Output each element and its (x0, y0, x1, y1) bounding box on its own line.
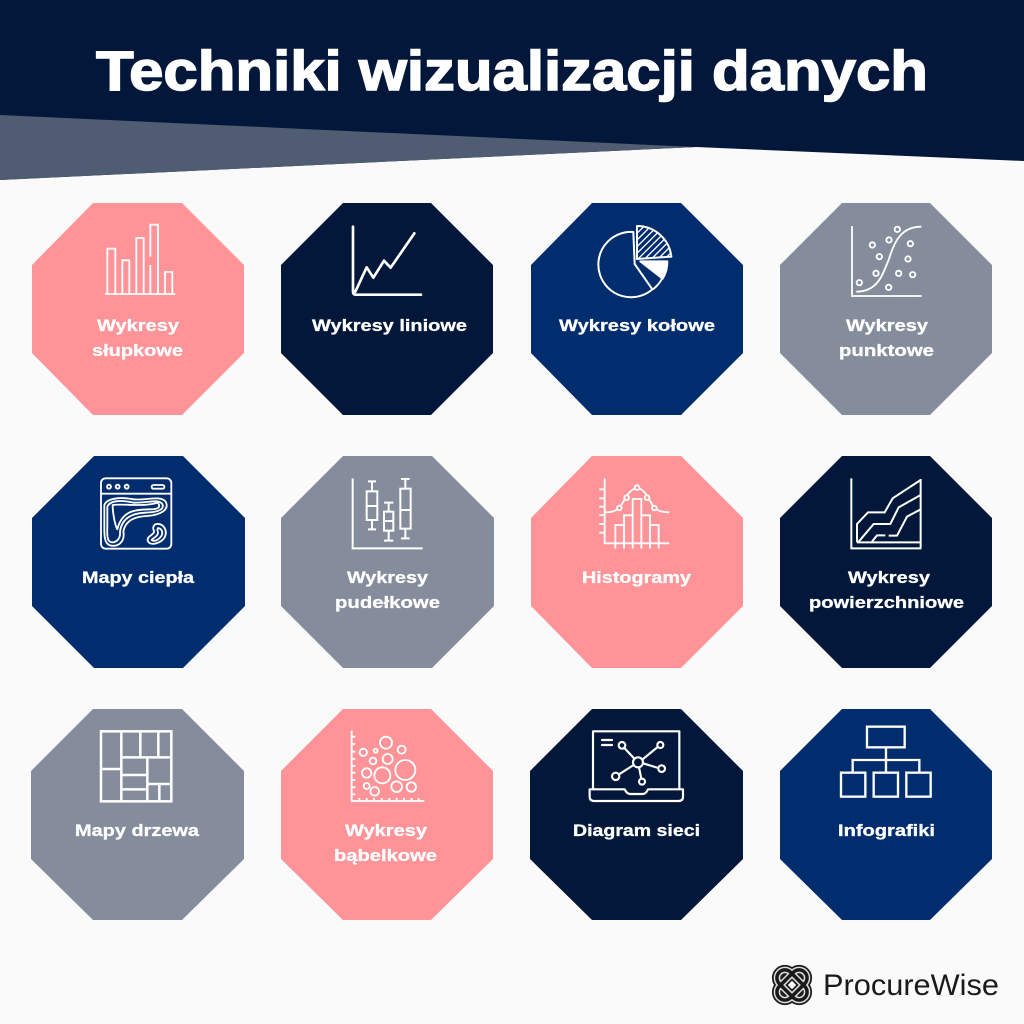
label: pudełkowe (335, 594, 440, 612)
label: Mapy drzewa (75, 822, 200, 840)
icon: histogram (599, 478, 669, 549)
label (92, 317, 183, 360)
label: powierzchniowe (809, 594, 964, 612)
label: Histogramy (582, 569, 692, 587)
label: Wykresy (345, 822, 428, 840)
label: Wykresy (347, 569, 429, 587)
label (809, 569, 964, 612)
panel: Wykresy kołowe (531, 203, 743, 415)
icon: scatter plot (852, 226, 922, 296)
icon: area chart (851, 478, 921, 548)
label: Mapy ciepła (82, 569, 195, 587)
label: punktowe (839, 342, 934, 360)
icon: network diagram on laptop (590, 731, 683, 801)
panel: Wykresy punktowe (780, 203, 992, 415)
label (335, 569, 440, 612)
logo: ProcureWise (774, 967, 999, 1003)
title: Techniki wizualizacji danych (96, 39, 928, 102)
label: Wykresy (848, 569, 931, 587)
panel: Wykresy bąbelkowe (281, 709, 493, 920)
panel: Histogramy (531, 456, 743, 668)
label (839, 317, 934, 360)
panel: Mapy ciepła (32, 456, 245, 668)
header banner (0, 0, 1024, 180)
label: Wykresy (846, 317, 929, 335)
panel: Wykresy liniowe (281, 203, 493, 415)
panel: Mapy drzewa (31, 709, 244, 920)
label: Wykresy liniowe (312, 317, 467, 335)
panel: Wykresy słupkowe (32, 203, 244, 415)
icon: treemap (101, 731, 171, 801)
icon: pie chart (598, 225, 675, 297)
label: bąbelkowe (334, 847, 437, 865)
icon: org chart (841, 727, 931, 797)
label: Wykresy (97, 317, 180, 335)
icon: heat map (101, 478, 171, 549)
panel: Wykresy pudełkowe (281, 456, 494, 668)
panel: Infografiki (780, 709, 992, 920)
label: Infografiki (838, 822, 935, 840)
icon: bar chart (105, 225, 175, 294)
panel: Wykresy powierzchniowe (780, 456, 992, 668)
label: Wykresy kołowe (559, 317, 715, 335)
wordmark: ProcureWise (823, 969, 999, 1002)
panel: Diagram sieci (530, 709, 743, 920)
icon: box plot (353, 478, 423, 548)
icon: interlaced knot (774, 967, 810, 1003)
label: słupkowe (92, 342, 183, 360)
label: Diagram sieci (573, 822, 700, 840)
icon: line chart (353, 227, 421, 295)
label (334, 822, 437, 865)
icon: bubble chart (352, 731, 424, 801)
